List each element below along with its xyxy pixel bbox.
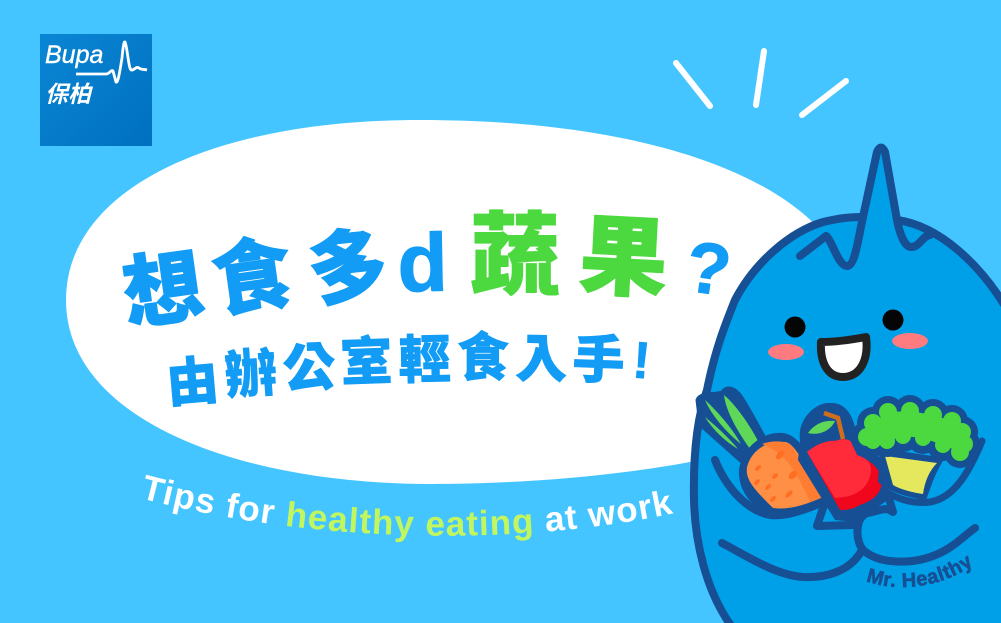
mascot cheeks: [768, 344, 804, 360]
subheading: 食: [457, 329, 509, 388]
subheading: 辦: [223, 344, 279, 406]
logo: Bupa: [40, 34, 152, 146]
headline: [117, 206, 736, 340]
broccoli dark outline: [851, 395, 980, 468]
logo: Bupa: Bupa: [45, 41, 103, 69]
headline: 果: [577, 206, 670, 309]
broccoli florets: [858, 402, 973, 461]
headline: 食: [206, 228, 298, 327]
logo: Bupa: 保柏: [45, 81, 94, 107]
headline: 多: [304, 220, 393, 317]
headline: d: [397, 218, 448, 309]
subheading: 由: [164, 352, 221, 414]
headline: 蔬: [470, 207, 560, 307]
subheading: 手: [572, 331, 626, 391]
subheading: 室: [339, 333, 393, 393]
subheading: 入: [515, 331, 568, 389]
subheading: !: [630, 331, 653, 391]
mascot body: [694, 150, 1001, 623]
mascot eyes: [784, 316, 806, 338]
carrot: [697, 388, 834, 518]
headline: 想: [117, 241, 209, 340]
mascot hair: [800, 148, 930, 266]
headline: ?: [681, 227, 736, 312]
speech bubble: [66, 120, 825, 484]
subheading: 輕: [398, 332, 451, 390]
mascot: Mr. Healthy: [690, 144, 1001, 623]
subheading: [164, 329, 653, 414]
broccoli: [851, 395, 982, 503]
burst lines: [676, 51, 846, 115]
mascot mouth: [821, 337, 867, 377]
mascot outline: [694, 217, 1001, 623]
carrot dots: [753, 449, 799, 503]
apple: [798, 403, 890, 522]
subheading: 公: [282, 339, 337, 399]
mascot arms: [715, 460, 975, 577]
mascot name: Mr. Healthy: [866, 556, 971, 588]
tagline: Tips for healthy eating at work: [145, 474, 674, 542]
